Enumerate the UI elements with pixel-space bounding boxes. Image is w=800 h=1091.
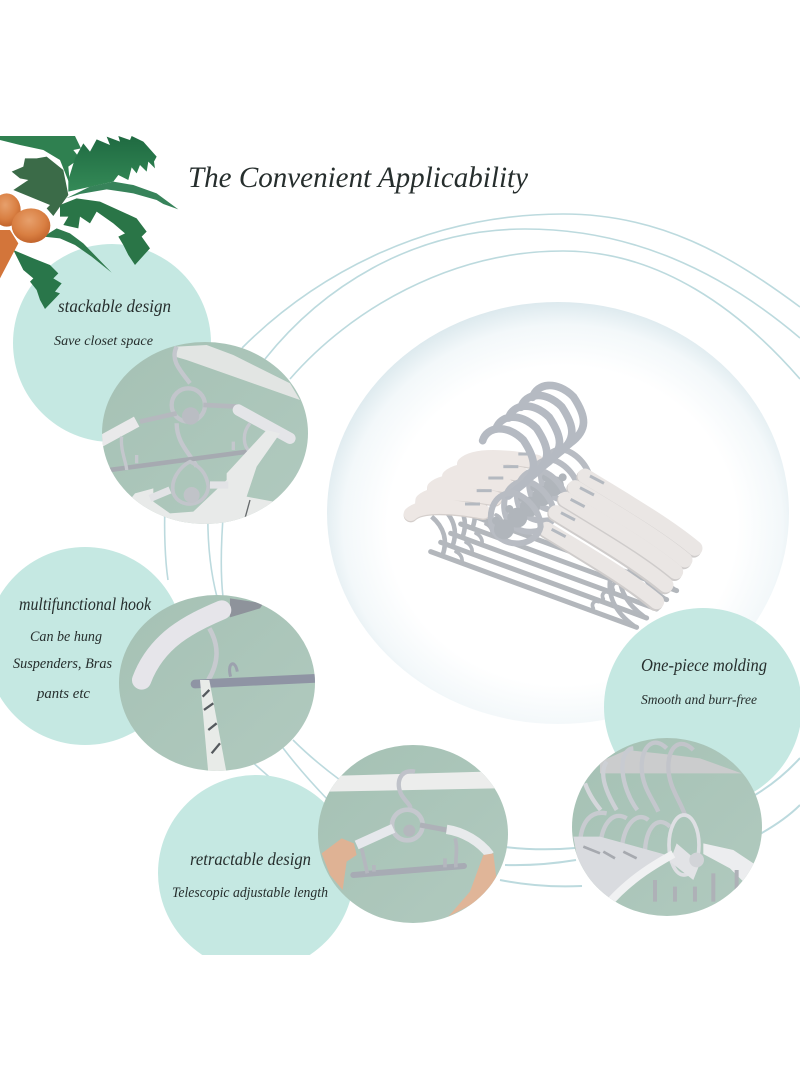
heading: multifunctional hook: [19, 594, 152, 614]
heading: retractable design: [190, 849, 311, 869]
palm frond: [60, 198, 150, 265]
teal circle: [13, 244, 211, 442]
photo: hangers on rail: [570, 735, 766, 919]
concentric ring lines: [165, 214, 800, 886]
palm frond: [66, 182, 178, 209]
central bubble: [327, 302, 789, 724]
panel: one-piece molding: [604, 608, 800, 806]
main product: stack of hangers: [411, 385, 695, 627]
teal circle: [604, 608, 800, 806]
caption line: Can be hung: [30, 629, 102, 645]
coconut: [0, 230, 18, 278]
heading: One-piece molding: [641, 655, 767, 675]
photo: retractable hanger: [315, 742, 511, 926]
palm frond: [68, 136, 157, 192]
teal circle: [158, 775, 350, 955]
caption: Smooth and burr-free: [641, 693, 757, 708]
coconut: [12, 208, 50, 243]
title: The Convenient Applicability: [188, 161, 529, 194]
caption: Save closet space: [54, 334, 153, 349]
caption line: Suspenders, Bras: [13, 656, 112, 672]
panel: multifunctional hook: [0, 547, 184, 745]
heading: stackable design: [58, 296, 171, 316]
palm frond: [0, 136, 81, 185]
photo: stacked hangers: [100, 340, 312, 530]
palm frond: [12, 157, 68, 216]
coconut: [0, 193, 21, 227]
caption: Telescopic adjustable length: [172, 885, 328, 901]
photo: hook detail: [115, 590, 320, 775]
palm frond: [43, 228, 112, 273]
teal circle: [0, 547, 184, 745]
panel: stackable design: [13, 244, 211, 442]
palm frond: [13, 250, 62, 309]
icon: palm tree: [0, 136, 178, 309]
panel: retractable design: [158, 775, 350, 955]
caption line: pants etc: [36, 686, 90, 702]
infographic canvas: [0, 136, 800, 955]
